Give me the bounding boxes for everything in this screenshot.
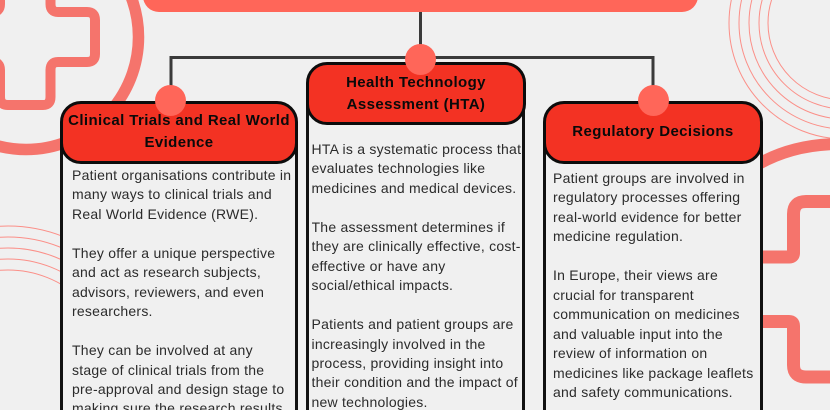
icon: right medical cross <box>755 202 830 377</box>
panel body <box>60 130 298 410</box>
heading <box>346 74 486 112</box>
panel header <box>543 100 763 164</box>
text block: and safety communications. <box>553 384 733 400</box>
text block: evaluates technologies like <box>312 160 485 176</box>
title bar <box>143 0 698 12</box>
panel body <box>543 130 763 410</box>
text block: HTA is a systematic process that <box>312 141 521 157</box>
panel body <box>306 95 525 410</box>
text block: crucial for transparent <box>553 287 694 303</box>
text block: effective or have any <box>312 258 445 274</box>
text block: new technologies. <box>312 394 428 410</box>
text block <box>553 170 753 400</box>
icon: left medical circle <box>0 0 138 150</box>
text block: pre-approval and design stage to <box>72 381 284 397</box>
text block: social/ethical impacts. <box>312 277 453 293</box>
text block: The assessment determines if <box>312 219 505 235</box>
text block: increasingly involved in the <box>312 336 486 352</box>
connector dot <box>405 44 436 75</box>
text block <box>312 141 521 410</box>
text block: many ways to clinical trials and <box>72 186 272 202</box>
text block: Patient organisations contribute in <box>72 167 291 183</box>
heading: Evidence <box>144 134 214 150</box>
text block: communication on medicines <box>553 306 740 322</box>
heading: Regulatory Decisions <box>572 122 734 140</box>
panel header <box>60 100 298 164</box>
text block: and valuable input into the <box>553 326 723 342</box>
text block: review of information on <box>553 345 707 361</box>
heading: Assessment (HTA) <box>347 96 485 112</box>
icon: top right concentric rings <box>729 0 830 139</box>
text block: In Europe, their views are <box>553 267 718 283</box>
text block: researchers. <box>72 303 153 319</box>
connector dot <box>155 85 186 116</box>
text block: their condition and the impact of <box>312 374 518 390</box>
text block: stage of clinical trials from the <box>72 362 264 378</box>
connector dot <box>638 85 668 116</box>
text block: real-world evidence for better <box>553 209 742 225</box>
text block: Patient groups are involved in <box>553 170 745 186</box>
icon: right medical circle arc <box>755 144 830 166</box>
text block: Real World Evidence (RWE). <box>72 206 258 222</box>
heading: Clinical Trials and Real World <box>68 112 290 128</box>
text block <box>72 167 291 410</box>
text block: advisors, reviewers, and even <box>72 284 264 300</box>
text block: medicines like package leaflets <box>553 365 753 381</box>
text block: Patients and patient groups are <box>312 316 514 332</box>
heading: Health Technology <box>346 74 486 90</box>
text block: medicine regulation. <box>553 228 683 244</box>
text block: regulatory processes offering <box>553 189 740 205</box>
text block: medicines and medical devices. <box>312 180 516 196</box>
text block: They offer a unique perspective <box>72 245 275 261</box>
text block: and act as research subjects, <box>72 264 261 280</box>
heading <box>68 112 290 150</box>
text block: they are clinically effective, cost- <box>312 238 521 254</box>
icon: lower left concentric rings <box>0 226 158 410</box>
text block: They can be involved at any <box>72 342 253 358</box>
connector lines <box>171 12 653 100</box>
text block: process, providing insight into <box>312 355 503 371</box>
icon: left medical cross <box>0 0 95 105</box>
panel header <box>306 62 526 125</box>
